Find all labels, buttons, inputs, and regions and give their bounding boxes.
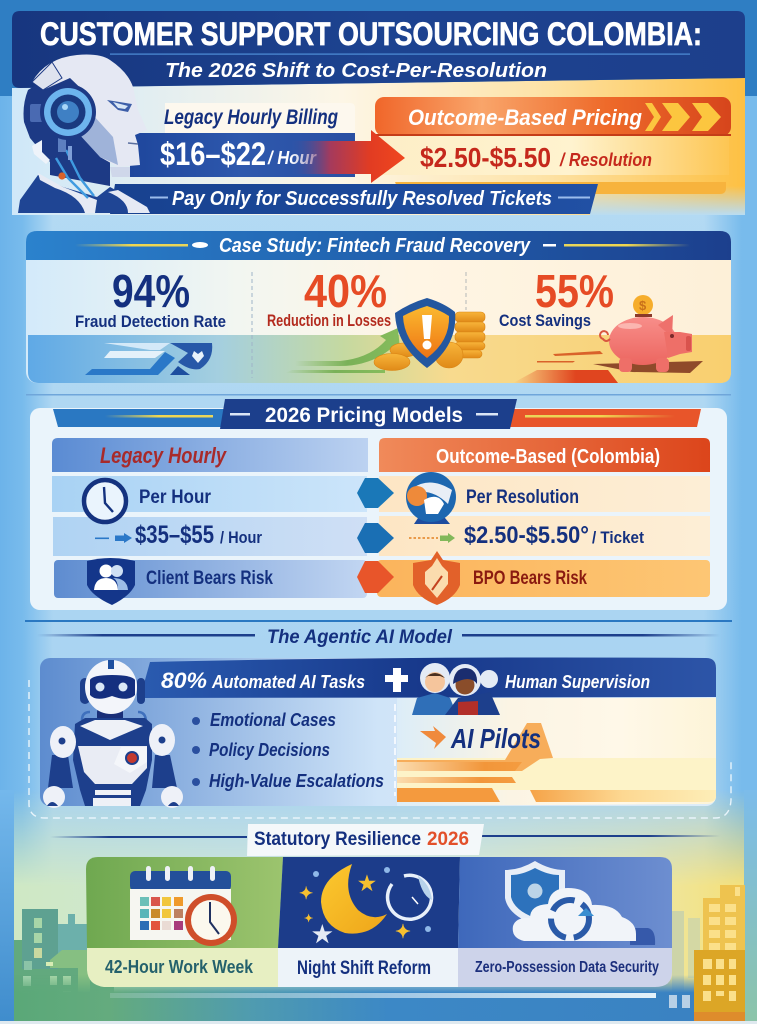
ground band: [14, 975, 696, 1024]
column: legacy hourly: Client Bears Risk: [146, 568, 273, 589]
card: 42-hour work week: [86, 857, 283, 987]
dashed frame: [29, 680, 731, 818]
card: night shift reform: ★: [312, 921, 333, 947]
header strip: [140, 658, 716, 698]
list: human escalations: High-Value Escalations: [209, 771, 384, 791]
stat: 94% fraud detection: [75, 265, 226, 331]
heading: statutory resilience: Statutory Resilience: [254, 829, 421, 850]
column: legacy hourly: $35–$55: [135, 521, 214, 549]
card: night shift reform: ✦: [304, 913, 313, 925]
list: human escalations: Emotional Cases: [210, 710, 336, 730]
column: outcome-based: [377, 438, 710, 605]
heading: agentic ai model: The Agentic AI Model: [267, 627, 453, 648]
subtitle: The 2026 Shift to Cost-Per-Resolution: [165, 60, 547, 82]
ribbon heading: 2026 Pricing Models: [265, 404, 463, 427]
stat: 55% cost savings: [499, 265, 614, 330]
header band: [12, 11, 745, 88]
case study heading: [26, 231, 731, 260]
column: outcome-based: / Ticket: [592, 528, 644, 547]
icon: shield with people: [87, 558, 135, 605]
column: outcome-based: Outcome-Based (Colombia): [436, 446, 660, 468]
card: zero-possession data security: [458, 857, 672, 987]
icon: piggy bank: $: [639, 298, 647, 313]
header strip: 80%: [161, 668, 207, 693]
list: human escalations: Policy Decisions: [209, 740, 330, 760]
panel: legacy hourly billing: $16–$22: [160, 136, 266, 172]
stat: 40% reduction in losses: [267, 265, 391, 330]
bottom edge: [0, 1021, 757, 1024]
icon: robot: [43, 660, 183, 808]
icon: clock: [84, 480, 126, 522]
panel: statutory cards: [86, 857, 672, 987]
panel: agentic model: [40, 658, 716, 808]
column: legacy hourly: / Hour: [220, 528, 262, 547]
icon: dotted arrow: [409, 533, 455, 543]
panel: case study: [26, 231, 731, 383]
icon: two human supervisors: [412, 663, 500, 715]
icon: shield and coins: [285, 298, 485, 373]
stat: 55% cost savings: 55%: [535, 265, 614, 317]
stat: 40% reduction in losses: Reduction in Losses: [267, 311, 391, 330]
column: outcome-based: $2.50-$5.50°: [464, 522, 589, 549]
divider: [25, 620, 732, 622]
panel: pricing models: [30, 399, 727, 610]
header strip: Human Supervision: [505, 672, 650, 692]
column: legacy hourly: [52, 438, 368, 605]
stat: 94% fraud detection: Fraud Detection Rate: [75, 312, 226, 331]
column: legacy hourly: Legacy Hourly: [100, 443, 227, 468]
panel: ai pilots: AI Pilots: [450, 723, 541, 754]
icon: blue speed motif: [85, 343, 212, 375]
panel: legacy hourly billing: [130, 103, 355, 177]
icon: support chat: [406, 472, 456, 524]
card: night shift reform: [278, 857, 460, 987]
card: night shift reform: ✦: [299, 884, 313, 903]
heading: statutory resilience: 2026: [427, 829, 469, 850]
icon: small arrow: [95, 533, 132, 543]
panel: hero pricing background: [12, 78, 745, 215]
column: legacy hourly: Per Hour: [139, 487, 212, 508]
card: night shift reform: ✦: [395, 922, 411, 943]
card: 42-hour work week: 42-Hour Work Week: [105, 957, 254, 977]
banner: pay only for resolved tickets: Pay Only for Successfully Resolved Tickets: [172, 188, 552, 210]
arrow: legacy to outcome: [290, 130, 405, 183]
skyline: front building: [669, 887, 745, 1024]
stat: 94% fraud detection: 94%: [112, 265, 190, 317]
card: night shift reform: Night Shift Reform: [297, 958, 431, 979]
banner: pay only for resolved tickets: [110, 184, 598, 214]
list: human escalations: [192, 710, 384, 791]
icon: piggy bank: [513, 295, 703, 383]
case study heading: Case Study: Fintech Fraud Recovery: [219, 235, 531, 257]
column: outcome-based: Per Resolution: [466, 487, 579, 508]
card: night shift reform: ★: [358, 873, 376, 895]
panel: legacy hourly billing: Legacy Hourly Billing: [164, 106, 338, 129]
header strip: Automated AI Tasks: [211, 672, 365, 692]
icon: orange shield: [413, 551, 460, 605]
panel: outcome-based pricing: [375, 97, 731, 194]
icon: robot head: [18, 55, 150, 213]
divider: [251, 272, 253, 378]
skyline: right buildings: [672, 885, 745, 991]
panel: outcome-based pricing: / Resolution: [559, 150, 652, 170]
stat: 40% reduction in losses: 40%: [304, 265, 387, 317]
panel: ai pilots: [397, 698, 716, 806]
skyline: left buildings: [14, 909, 114, 1024]
ribbon heading: [53, 399, 701, 429]
arrows between columns: [357, 478, 394, 593]
panel: outcome-based pricing: $2.50-$5.50: [420, 142, 551, 173]
card: zero-possession data security: Zero-Possession Data Security: [475, 959, 659, 976]
panel: legacy hourly billing: / Hour: [267, 148, 317, 168]
hero fade: [590, 186, 745, 215]
stat: 55% cost savings: Cost Savings: [499, 311, 591, 330]
divider: [26, 394, 731, 396]
decorative light strip: [110, 993, 656, 998]
heading: statutory resilience: [50, 824, 720, 856]
panel: outcome-based pricing: Outcome-Based Pricing: [408, 105, 643, 130]
column: outcome-based: BPO Bears Risk: [473, 568, 587, 589]
